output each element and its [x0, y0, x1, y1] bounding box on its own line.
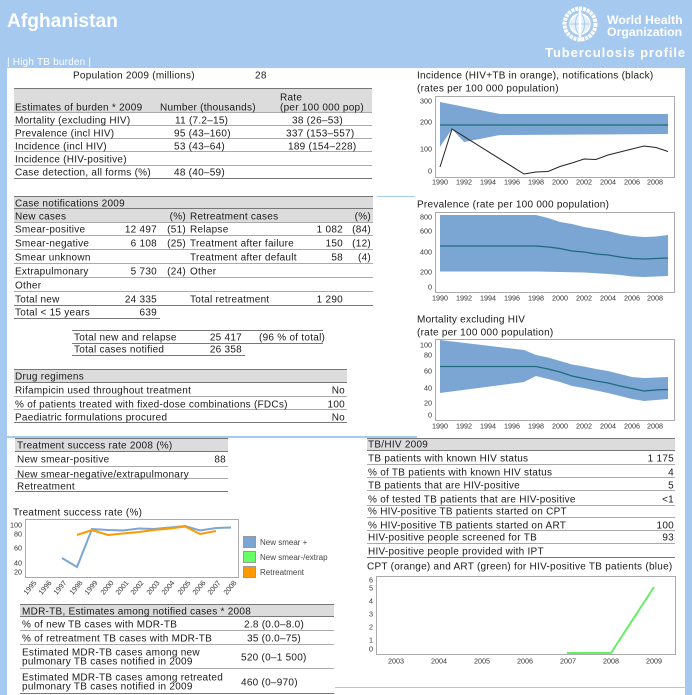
axis labels: 1994 [480, 178, 496, 186]
panel: estimates of burden: Case detection, all forms (%) [15, 168, 151, 178]
axis labels: 2002 [576, 294, 592, 302]
panel: TB/HIV: 1 175 [648, 454, 674, 464]
legend: Retreatment [260, 568, 305, 577]
chart: incidence [417, 70, 674, 186]
panel: estimates of burden: Prevalence (incl HIV) [15, 128, 114, 140]
axis labels: 1992 [456, 422, 472, 430]
panel: case notifications: (%) [170, 212, 186, 222]
panel: case notifications: New cases [15, 212, 66, 222]
axis labels: 4 [369, 596, 373, 606]
panel: case notifications: (25) [167, 238, 186, 250]
panel: case notifications: Total < 15 years [15, 308, 90, 318]
panel: estimates of burden: Mortality (excluding HIV) [15, 116, 130, 126]
axis labels: 1997 [51, 579, 69, 597]
axis labels: 1 [369, 636, 373, 644]
panel: TB/HIV: 93 [662, 532, 674, 544]
axis labels: 600 [420, 226, 432, 236]
panel: TB/HIV: TB/HIV 2009 [368, 440, 428, 450]
panel: TB/HIV: % HIV-positive TB patients started on ART [368, 520, 566, 532]
panel: TB/HIV: 4 [668, 468, 674, 478]
burden tag: | High TB burden | [7, 57, 91, 68]
panel: case notifications: (24) [167, 266, 186, 278]
axis labels: 2007 [560, 656, 576, 666]
panel: MDR-TB: % of retreatment TB cases with MDR-TB [22, 634, 212, 644]
panel: TB/HIV: 5 [668, 480, 674, 492]
axis labels [369, 576, 662, 666]
axis labels: 2002 [576, 178, 592, 186]
chart title [417, 70, 653, 94]
panel: treatment success rate: Treatment success rate 2008 (%) [17, 440, 173, 452]
chart title: Incidence (HIV+TB in orange), notifications (black) [417, 70, 653, 82]
panel: case notifications: Smear unknown [15, 252, 91, 264]
panel: estimates of burden: 95 (43–160) [174, 128, 231, 140]
panel: estimates of burden: 337 (153–557) [286, 128, 354, 140]
axis labels: 1998 [67, 579, 85, 597]
axis labels: 1996 [36, 579, 54, 597]
axis labels: 2002 [576, 422, 592, 430]
axis labels: 2006 [624, 178, 640, 186]
panel: case notifications: (4) [358, 252, 371, 264]
axis labels: 2002 [128, 579, 146, 597]
axis labels: 40 [424, 384, 432, 392]
chart title: (rate per 100 000 population) [417, 328, 554, 338]
panel: totals: Total new and relapse [74, 332, 177, 344]
panel: drug regimens: % of patients treated with fixed-dose combinations (FDCs) [15, 400, 288, 410]
panel: estimates of burden: 53 (43–64) [174, 142, 225, 152]
axis labels: 2000 [552, 178, 568, 186]
panel: TB/HIV: HIV-positive people provided with IPT [368, 546, 544, 558]
population: Population 2009 (millions) [73, 70, 195, 82]
panel: estimates of burden: Incidence (incl HIV) [15, 142, 107, 152]
panel: totals: (96 % of total) [259, 332, 325, 344]
panel: TB/HIV: % HIV-positive TB patients started on CPT [368, 506, 567, 518]
axis labels: 2005 [474, 656, 490, 666]
axis labels: 0 [369, 644, 373, 654]
panel: case notifications: (51) [167, 224, 186, 236]
panel: MDR-TB: pulmonary TB cases notified in 2009 [22, 656, 193, 668]
panel: case notifications: 5 730 [131, 266, 157, 278]
axis labels: 2006 [624, 294, 640, 302]
axis labels: 1990 [432, 422, 448, 430]
axis labels: 2000 [552, 294, 568, 302]
panel: drug regimens: Drug regimens [15, 372, 84, 382]
panel: case notifications: Other [15, 280, 42, 292]
panel: MDR-TB: 35 (0.0–75) [247, 634, 301, 644]
header banner [0, 0, 692, 68]
panel: TB/HIV: % of TB patients with known HIV status [368, 468, 552, 478]
axis labels: 1998 [528, 422, 544, 430]
panel: estimates of burden: Estimates of burden * 2009 [15, 102, 143, 114]
panel: TB/HIV: TB patients that are HIV-positive [368, 480, 520, 492]
axis labels: 1996 [504, 178, 520, 186]
panel: drug regimens: No [332, 412, 345, 424]
chart title: Mortality excluding HIV [417, 314, 525, 326]
axis labels: 1994 [480, 422, 496, 430]
axis labels: 200 [420, 118, 432, 126]
panel: MDR-TB: % of new TB cases with MDR-TB [22, 620, 177, 630]
axis labels: 2006 [517, 656, 533, 666]
chart title [417, 314, 554, 338]
panel: MDR-TB: 520 (0–1 500) [241, 652, 307, 664]
axis labels: 2003 [144, 579, 162, 597]
population [73, 70, 267, 82]
axis labels: 1996 [504, 294, 520, 302]
panel: case notifications: Smear-positive [15, 224, 86, 236]
population: 28 [255, 70, 267, 82]
axis labels: 6 [369, 576, 373, 584]
legend: New smear + [260, 538, 308, 547]
panel: drug regimens [14, 369, 347, 424]
panel: totals: 25 417 [210, 332, 242, 344]
axis labels [420, 340, 663, 430]
axis labels: 2004 [159, 579, 177, 597]
panel: estimates of burden: 48 (40–59) [174, 168, 225, 178]
icon: WHO emblem [564, 7, 596, 41]
axis labels: 2006 [190, 579, 208, 597]
chart title: (rates per 100 000 population) [417, 84, 559, 94]
panel: case notifications: 1 082 [317, 224, 343, 236]
axis labels: 2008 [647, 178, 663, 186]
axis labels: 2003 [388, 656, 404, 666]
axis labels: 2004 [600, 178, 616, 186]
axis labels: 1998 [528, 178, 544, 186]
axis labels: 1998 [528, 294, 544, 302]
axis labels: 1994 [480, 294, 496, 302]
axis labels: 80 [14, 530, 22, 538]
chart title: CPT (orange) and ART (green) for HIV-positive TB patients (blue) [367, 562, 672, 572]
axis labels: 2008 [603, 656, 619, 666]
panel: TB/HIV: <1 [662, 494, 674, 506]
axis labels [420, 212, 663, 302]
panel: estimates of burden: Number (thousands) [160, 102, 256, 114]
panel: treatment success rate: Retreatment [17, 482, 75, 492]
axis labels: 2004 [600, 294, 616, 302]
title: Afghanistan [7, 11, 118, 32]
axis labels: 5 [369, 584, 373, 592]
chart: mortality [417, 314, 674, 430]
axis labels: 1990 [432, 294, 448, 302]
panel: drug regimens: No [332, 386, 345, 396]
axis labels: 2008 [221, 579, 239, 597]
panel: case notifications: Smear-negative [15, 238, 89, 250]
axis labels: 400 [420, 248, 432, 256]
axis labels: 2 [369, 622, 373, 632]
panel: MDR-TB: pulmonary TB cases notified in 2009 [22, 682, 193, 692]
axis labels: 300 [420, 96, 432, 106]
panel: estimates of burden: 38 (26–53) [292, 116, 343, 126]
panel: MDR-TB: Estimated MDR-TB cases among retreated [22, 672, 223, 684]
panel: MDR-TB: MDR-TB, Estimates among notified cases * 2008 [22, 606, 251, 618]
WHO wordmark: Organization [607, 25, 682, 39]
panel: TB/HIV: 100 [657, 520, 674, 532]
panel: TB/HIV: HIV-positive people screened for TB [368, 532, 537, 544]
panel: MDR-TB: Estimated MDR-TB cases among new [22, 648, 200, 658]
axis labels [420, 96, 663, 186]
panel: estimates of burden [14, 88, 372, 178]
panel: TB/HIV: % of tested TB patients that are HIV-positive [368, 494, 576, 506]
panel: drug regimens: 100 [328, 400, 345, 410]
axis labels: 2009 [646, 656, 662, 666]
axis labels: 60 [424, 366, 432, 376]
panel: treatment success rate: New smear-negative/extrapulmonary [17, 470, 189, 480]
panel: case notifications: Total new [15, 294, 60, 306]
panel: estimates of burden: 189 (154–228) [288, 142, 356, 152]
panel: MDR-TB: 460 (0–970) [241, 678, 298, 688]
chart: prevalence [417, 200, 674, 302]
panel: case notifications: 1 290 [317, 294, 343, 306]
panel: case notifications: (84) [352, 224, 371, 236]
axis labels: 800 [420, 212, 432, 222]
panel: estimates of burden: Incidence (HIV-positive) [15, 154, 127, 166]
panel: estimates of burden: (per 100 000 pop) [280, 102, 364, 114]
chart title: Treatment success rate (%) [13, 508, 142, 518]
axis labels: 1992 [456, 178, 472, 186]
axis labels: 2001 [113, 579, 131, 597]
subtitle: Tuberculosis profile: Tuberculosis profile [545, 45, 686, 60]
axis labels: 2004 [431, 656, 447, 666]
panel: case notifications: Treatment after failure [190, 238, 294, 250]
axis labels [10, 520, 239, 597]
panel: case notifications: 6 108 [131, 238, 157, 250]
panel: treatment success rate [15, 438, 228, 492]
panel: case notifications: (%) [355, 212, 371, 222]
panel: totals [72, 330, 325, 356]
axis labels: 1995 [21, 579, 39, 597]
panel: totals: 26 358 [210, 344, 242, 356]
axis labels: 1999 [82, 579, 100, 597]
panel: case notifications: 12 497 [125, 224, 157, 236]
panel: MDR-TB: 2.8 (0.0–8.0) [244, 620, 304, 630]
panel: treatment success rate: 88 [214, 454, 226, 466]
axis labels: 100 [420, 144, 432, 154]
axis labels: 2008 [647, 422, 663, 430]
panel: case notifications [14, 196, 373, 318]
axis labels: 100 [420, 340, 432, 350]
axis labels: 60 [14, 544, 22, 552]
panel: MDR-TB [20, 604, 334, 694]
panel: estimates of burden: 11 (7.2–15) [175, 116, 228, 126]
panel: case notifications: Treatment after default [190, 252, 297, 264]
panel: treatment success rate: New smear-positive [17, 454, 110, 466]
axis labels: 2008 [647, 294, 663, 302]
panel: TB/HIV [367, 438, 675, 558]
axis labels: 3 [369, 610, 373, 618]
axis labels: 2005 [175, 579, 193, 597]
legend: New smear-/extrap [260, 553, 328, 562]
panel: case notifications: 24 335 [125, 294, 157, 306]
chart title: Prevalence (rate per 100 000 population) [417, 200, 609, 210]
axis labels: 2007 [205, 579, 223, 597]
axis labels: 2000 [552, 422, 568, 430]
axis labels: 1992 [456, 294, 472, 302]
panel: totals: Total cases notified [74, 344, 164, 356]
axis labels: 100 [10, 520, 22, 530]
legend [244, 536, 328, 578]
panel: drug regimens: Paediatric formulations procured [15, 412, 167, 424]
axis labels: 1996 [504, 422, 520, 430]
axis labels: 20 [424, 398, 432, 408]
panel: case notifications: Other [190, 266, 217, 278]
panel: case notifications: 639 [140, 308, 157, 318]
panel: case notifications: Relapse [190, 224, 229, 236]
chart: CPT and ART [367, 562, 676, 666]
chart: treatment success rate [10, 508, 328, 597]
axis labels: 200 [420, 268, 432, 276]
axis labels: 40 [14, 558, 22, 568]
axis labels: 0 [428, 166, 432, 176]
panel: TB/HIV: TB patients with known HIV status [368, 454, 528, 464]
axis labels: 20 [14, 568, 22, 576]
panel: estimates of burden: Rate [280, 92, 302, 104]
panel: case notifications: Extrapulmonary [15, 266, 89, 278]
axis labels: 2006 [624, 422, 640, 430]
panel: case notifications: Retreatment cases [190, 212, 278, 222]
axis labels: 1990 [432, 178, 448, 186]
panel: case notifications: 150 [326, 238, 343, 250]
panel: case notifications: (12) [352, 238, 371, 250]
panel: case notifications: 58 [331, 252, 343, 264]
axis labels: 80 [424, 350, 432, 360]
axis labels: 0 [428, 282, 432, 292]
panel: case notifications: Case notifications 2009 [15, 198, 125, 210]
axis labels: 2004 [600, 422, 616, 430]
panel: case notifications: Total retreatment [190, 294, 269, 306]
axis labels: 0 [428, 410, 432, 420]
panel: drug regimens: Rifampicin used throughout treatment [15, 386, 191, 396]
axis labels: 2000 [98, 579, 116, 597]
WHO wordmark [607, 13, 683, 39]
WHO wordmark: World Health [607, 13, 683, 27]
